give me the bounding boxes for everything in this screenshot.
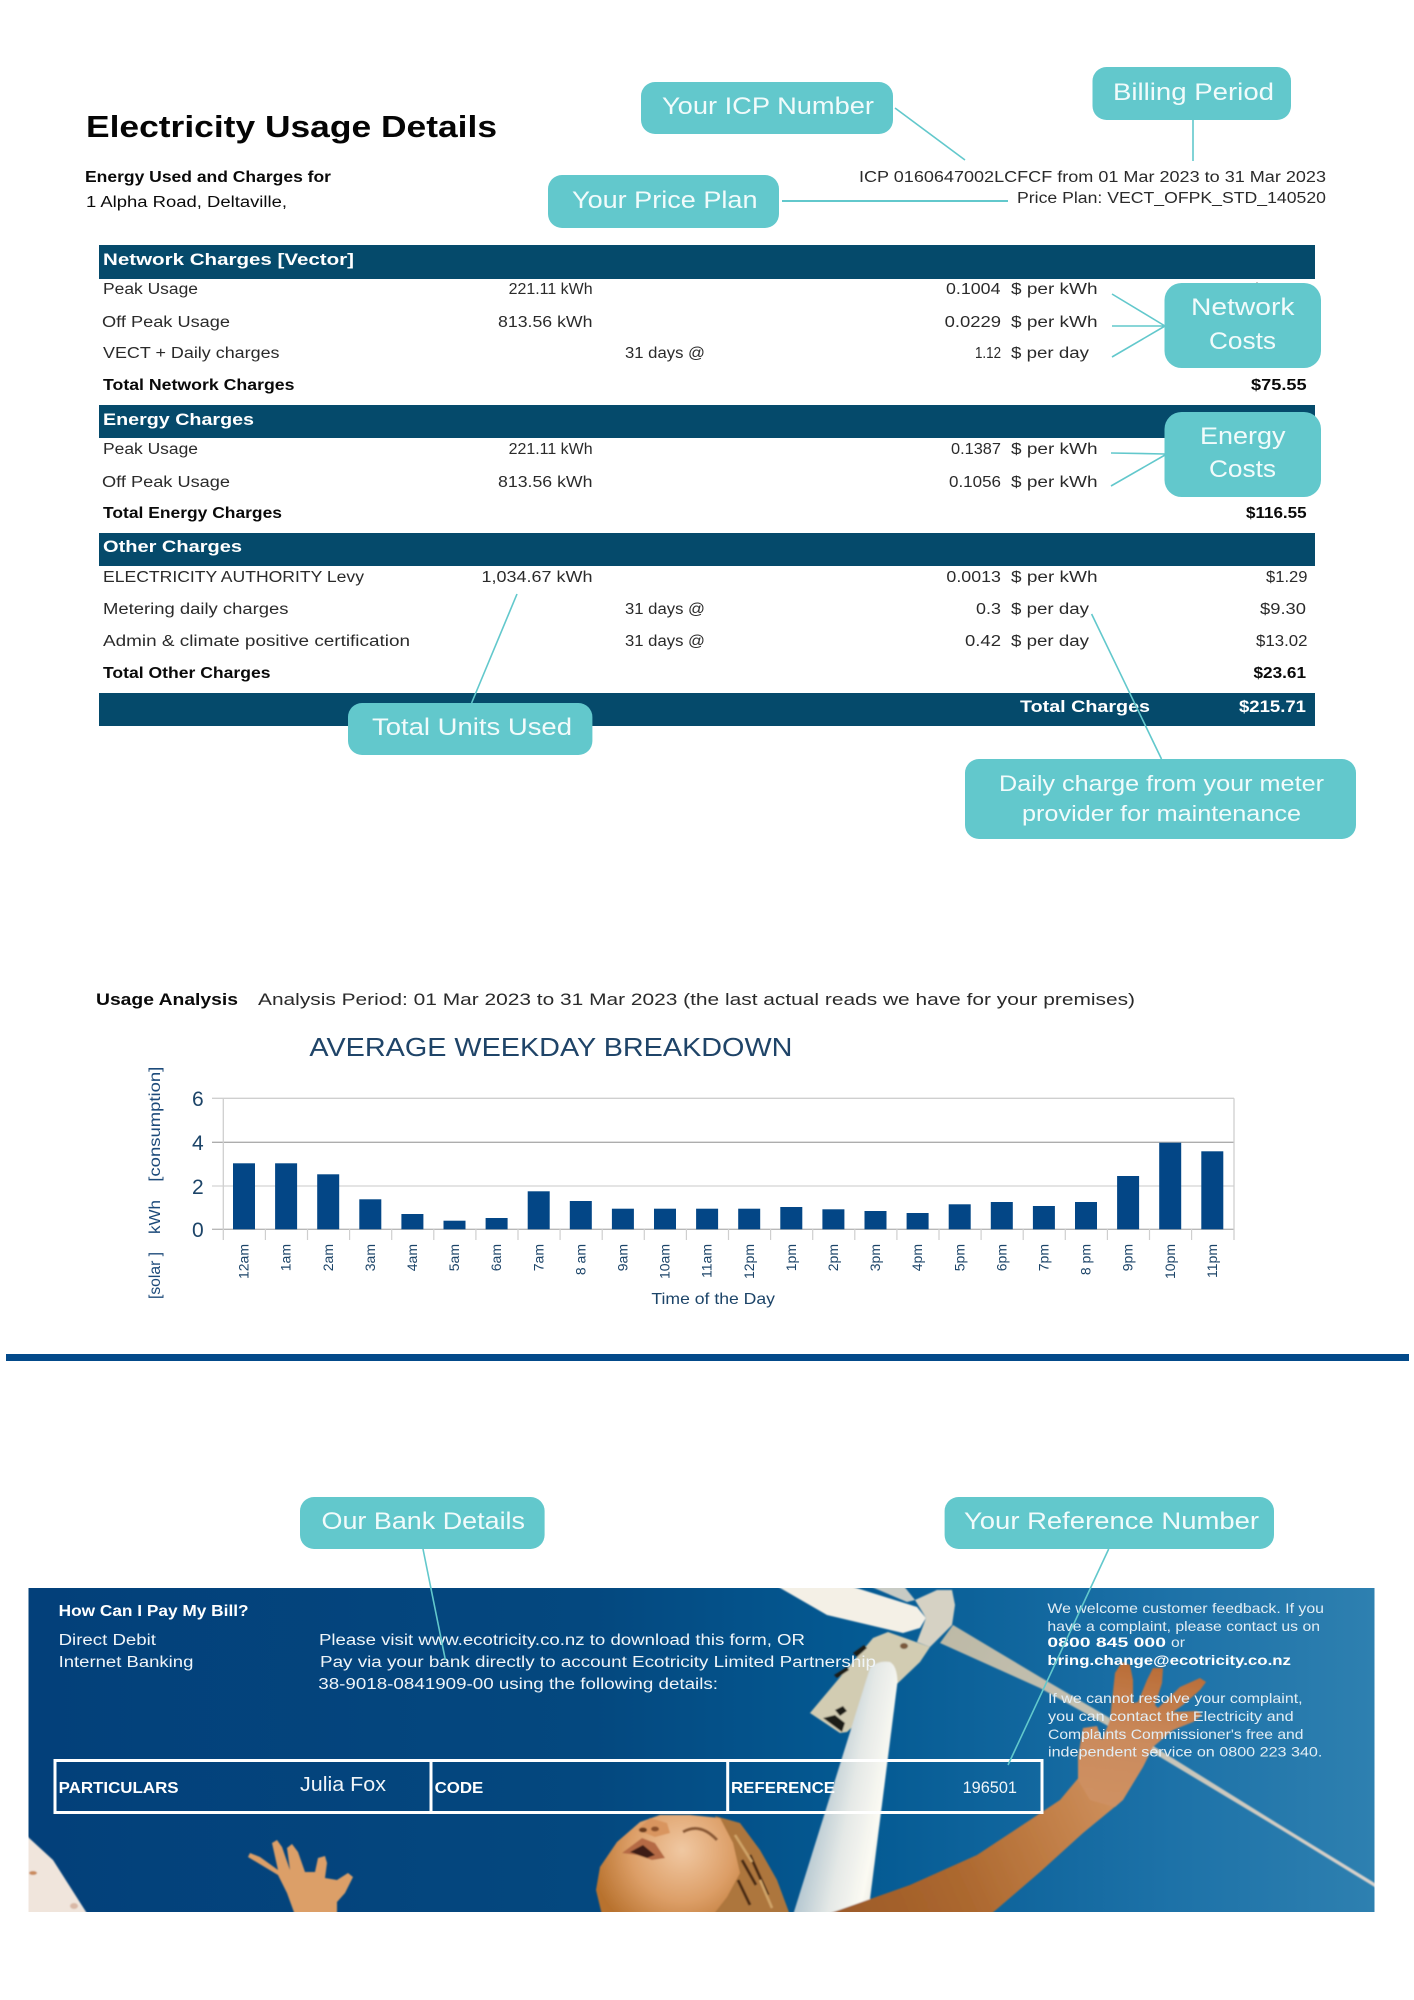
callout: energy costs: Costs	[1209, 456, 1276, 483]
row: energy off peak usage: Off Peak Usage	[102, 474, 230, 491]
panel: energy charges	[99, 405, 1315, 522]
photo: long blade	[940, 1625, 1378, 1889]
payment reference table: Julia Fox	[300, 1774, 386, 1796]
row: admin: $13.02	[1256, 633, 1308, 650]
photo: arm	[831, 1778, 1116, 1912]
x axis labels: 3am	[362, 1244, 378, 1271]
row: peak usage: 221.11 kWh	[509, 281, 593, 298]
usage analysis heading: Usage Analysis	[96, 990, 238, 1009]
customer feedback text	[1047, 1600, 1324, 1760]
customer address block	[85, 169, 331, 211]
row: daily charges: 1.12	[975, 345, 1001, 362]
panel: other charges	[99, 533, 1315, 682]
panel: network charges	[99, 245, 1315, 394]
x axis labels: 2am	[320, 1244, 336, 1271]
section header: energy charges: Energy Charges	[103, 411, 254, 429]
customer feedback text: We welcome customer feedback. If you	[1047, 1600, 1324, 1616]
heading: how can I pay my bill: How Can I Pay My Bill?	[59, 1603, 249, 1620]
callout: your reference number	[945, 1497, 1274, 1765]
row: levy: 0.0013	[946, 569, 1001, 586]
row: metering: 0.3	[976, 601, 1001, 618]
x axis labels: 4am	[404, 1244, 420, 1271]
x axis labels: 10pm	[1162, 1244, 1178, 1279]
row: energy off peak usage: $ per kWh	[1011, 474, 1098, 491]
photo: left hand	[248, 1840, 353, 1915]
row: total other charges: Total Other Charges	[103, 665, 270, 682]
payment reference table: PARTICULARS	[59, 1780, 179, 1797]
y axis labels: 2	[192, 1176, 204, 1199]
callout: energy costs: Energy	[1200, 423, 1286, 450]
callout: total units used: Total Units Used	[372, 714, 572, 741]
customer feedback text: bring.change@ecotricity.co.nz	[1047, 1652, 1291, 1668]
row: peak usage: 0.1004	[946, 281, 1001, 298]
x axis labels: 3pm	[867, 1244, 883, 1271]
row: admin: Admin & climate positive certification	[103, 633, 410, 650]
row: metering: $9.30	[1260, 601, 1306, 618]
row: energy off peak usage: 813.56 kWh	[498, 474, 592, 491]
photo: raised hand	[1078, 1662, 1206, 1807]
row: total network charges	[103, 377, 1307, 394]
payment instructions: Pay via your bank directly to account Ecotricity Limited Partnership	[320, 1654, 876, 1671]
row: metering: 31 days @	[625, 601, 705, 618]
section header: other charges	[99, 533, 1315, 566]
x axis labels: 11pm	[1204, 1244, 1220, 1278]
row: peak usage: Peak Usage	[103, 281, 198, 298]
photo: wind turbine and child reaching up	[20, 1585, 1378, 1915]
callout: daily charge from meter provider	[965, 614, 1356, 839]
callout: our bank details: Our Bank Details	[322, 1508, 525, 1535]
usage analysis heading	[96, 990, 1135, 1009]
callout: energy costs	[1111, 412, 1321, 497]
bars	[233, 1143, 1223, 1229]
row: energy peak usage: 0.1387	[951, 441, 1001, 458]
y axis title	[147, 1067, 164, 1299]
photo: lower left shoulder	[20, 1830, 88, 1915]
x axis labels: 6pm	[993, 1244, 1009, 1271]
callout: network costs: Network	[1191, 294, 1296, 321]
x axis labels: 2pm	[825, 1244, 841, 1271]
row: levy: $1.29	[1266, 569, 1308, 586]
x axis labels: 12pm	[741, 1244, 757, 1279]
customer address block: 1 Alpha Road, Deltaville,	[86, 194, 287, 211]
row: total other charges: $23.61	[1254, 665, 1306, 682]
payment methods list: Direct Debit	[59, 1632, 157, 1649]
y axis title: [solar ]	[147, 1252, 164, 1299]
row: energy off peak usage	[102, 474, 1098, 491]
chart grid and axes	[212, 1098, 1234, 1240]
row: metering: $ per day	[1011, 601, 1089, 618]
x axis labels: 8 am	[572, 1244, 588, 1275]
payment instructions: Please visit www.ecotricity.co.nz to download this form, OR	[319, 1632, 805, 1649]
x axis labels: 10am	[657, 1244, 673, 1279]
row: total network charges: Total Network Charges	[103, 377, 294, 394]
row: levy: 1,034.67 kWh	[482, 569, 592, 586]
row: peak usage	[103, 281, 1306, 298]
row: total energy charges: $116.55	[1246, 505, 1307, 522]
x axis labels: 5am	[446, 1244, 462, 1271]
section header: other charges: Other Charges	[103, 538, 242, 556]
x axis labels: 5pm	[951, 1244, 967, 1271]
row: levy	[103, 569, 1308, 586]
y axis labels	[192, 1088, 204, 1242]
panel: how can I pay my bill	[20, 1585, 1378, 1915]
payment reference table	[55, 1760, 1042, 1813]
customer feedback text: independent service on 0800 223 340.	[1048, 1744, 1322, 1760]
payment methods list	[59, 1632, 193, 1671]
row: daily charges: VECT + Daily charges	[103, 345, 280, 362]
x axis labels: 1am	[278, 1244, 294, 1271]
photo: face	[596, 1815, 740, 1915]
callout: total units used	[348, 594, 592, 755]
y axis labels: 6	[192, 1088, 204, 1111]
x axis labels: 9pm	[1120, 1244, 1136, 1271]
y axis title: [consumption]	[147, 1067, 164, 1182]
x axis labels	[236, 1244, 1220, 1279]
row: peak usage: $ per kWh	[1011, 281, 1098, 298]
payment reference table: REFERENCE	[731, 1780, 835, 1797]
y axis labels: 0	[192, 1219, 204, 1242]
callout: your ICP number	[641, 82, 965, 160]
row: total other charges	[103, 665, 1306, 682]
row: off peak usage: $ per kWh	[1011, 314, 1098, 331]
usage analysis heading: Analysis Period: 01 Mar 2023 to 31 Mar 2023 (the last actual reads we have for your premises)	[258, 990, 1135, 1009]
photo: hub	[915, 1590, 955, 1647]
x axis labels: 4pm	[909, 1244, 925, 1271]
row: daily charges: 31 days @	[625, 345, 705, 362]
x axis labels: 11am	[699, 1244, 715, 1278]
customer feedback text: have a complaint, please contact us on	[1047, 1618, 1320, 1634]
row: peak usage: $22.20	[1252, 281, 1306, 298]
payment reference table: 196501	[963, 1778, 1017, 1797]
callout: your price plan	[548, 175, 1008, 228]
payment reference table: CODE	[435, 1780, 483, 1797]
row: energy off peak usage: 0.1056	[949, 474, 1001, 491]
x axis labels: 8 pm	[1078, 1244, 1094, 1275]
ICP and price plan text	[859, 169, 1326, 207]
payment methods list: Internet Banking	[59, 1654, 193, 1671]
customer feedback text: If we cannot resolve your complaint,	[1048, 1690, 1303, 1706]
y axis labels: 4	[192, 1132, 204, 1155]
row: energy peak usage: $ per kWh	[1011, 441, 1098, 458]
row: admin: 0.42	[965, 633, 1001, 650]
bar chart: average weekday breakdown	[147, 1067, 1234, 1308]
title: Electricity Usage Details	[86, 109, 497, 144]
payment instructions	[318, 1632, 876, 1693]
photo: white blade	[775, 1585, 926, 1633]
ICP and price plan text: Price Plan: VECT_OFPK_STD_140520	[1017, 190, 1326, 207]
row: total network charges: $75.55	[1251, 377, 1307, 394]
callout: your ICP number: Your ICP Number	[662, 93, 874, 120]
callout: your price plan: Your Price Plan	[572, 187, 758, 214]
total charges bar: $215.71	[1239, 698, 1306, 716]
x axis labels: 7pm	[1036, 1244, 1052, 1271]
row: admin: 31 days @	[625, 633, 705, 650]
customer address block: Energy Used and Charges for	[85, 169, 331, 186]
row: off peak usage: 0.0229	[945, 314, 1001, 331]
payment instructions: 38-9018-0841909-00 using the following details:	[318, 1676, 718, 1693]
ICP and price plan text: ICP 0160647002LCFCF from 01 Mar 2023 to 31 Mar 2023	[859, 169, 1326, 186]
y axis title: kWh	[147, 1200, 164, 1234]
panel background sky	[28, 1588, 1374, 1912]
customer feedback text: 0800 845 000	[1047, 1634, 1166, 1650]
callout: network costs: Costs	[1209, 328, 1276, 355]
row: levy: ELECTRICITY AUTHORITY Levy	[103, 569, 364, 586]
row: levy: $ per kWh	[1011, 569, 1098, 586]
row: metering: Metering daily charges	[103, 601, 289, 618]
row: energy peak usage: Peak Usage	[103, 441, 198, 458]
photo: rear blade	[867, 1585, 915, 1602]
row: admin: $ per day	[1011, 633, 1089, 650]
photo: hair	[714, 1815, 790, 1912]
section header: energy charges	[99, 405, 1315, 438]
x axis labels: 1pm	[783, 1244, 799, 1271]
row: total energy charges: Total Energy Charges	[103, 505, 282, 522]
callout: billing period	[1092, 67, 1291, 161]
total charges bar: Total Charges	[1020, 698, 1150, 716]
x axis labels: 6am	[488, 1244, 504, 1271]
row: daily charges: $ per day	[1011, 345, 1089, 362]
row: off peak usage: Off Peak Usage	[102, 314, 230, 331]
total charges bar	[99, 693, 1315, 726]
row: total energy charges	[103, 505, 1307, 522]
customer feedback text: Complaints Commissioner's free and	[1048, 1726, 1304, 1742]
photo: tower	[793, 1662, 898, 1915]
photo: nacelle	[810, 1632, 930, 1733]
x axis labels: 7am	[530, 1244, 546, 1271]
section header: network charges: Network Charges [Vector]	[103, 251, 354, 269]
row: energy peak usage: 221.11 kWh	[509, 441, 593, 458]
x axis labels: 12am	[236, 1244, 252, 1279]
row: metering	[103, 601, 1306, 618]
chart title: AVERAGE WEEKDAY BREAKDOWN	[309, 1032, 792, 1062]
row: energy peak usage	[103, 441, 1098, 458]
row: off peak usage: 813.56 kWh	[498, 314, 592, 331]
callout: daily charge from meter provider: Daily charge from your meter	[999, 771, 1324, 796]
x axis labels: 9am	[614, 1244, 630, 1271]
section header: network charges	[99, 245, 1315, 279]
customer feedback text: or	[1171, 1634, 1185, 1650]
row: daily charges	[103, 345, 1089, 362]
callout: billing period: Billing Period	[1113, 79, 1274, 106]
x axis title: Time of the Day	[651, 1291, 775, 1308]
callout: our bank details	[300, 1497, 545, 1660]
customer feedback text: you can contact the Electricity and	[1048, 1708, 1294, 1724]
row: admin	[103, 633, 1308, 650]
callout: network costs	[1112, 283, 1321, 368]
row: off peak usage	[102, 314, 1098, 331]
callout: your reference number: Your Reference Number	[964, 1508, 1259, 1535]
callout: daily charge from meter provider: provider for maintenance	[1022, 801, 1301, 826]
